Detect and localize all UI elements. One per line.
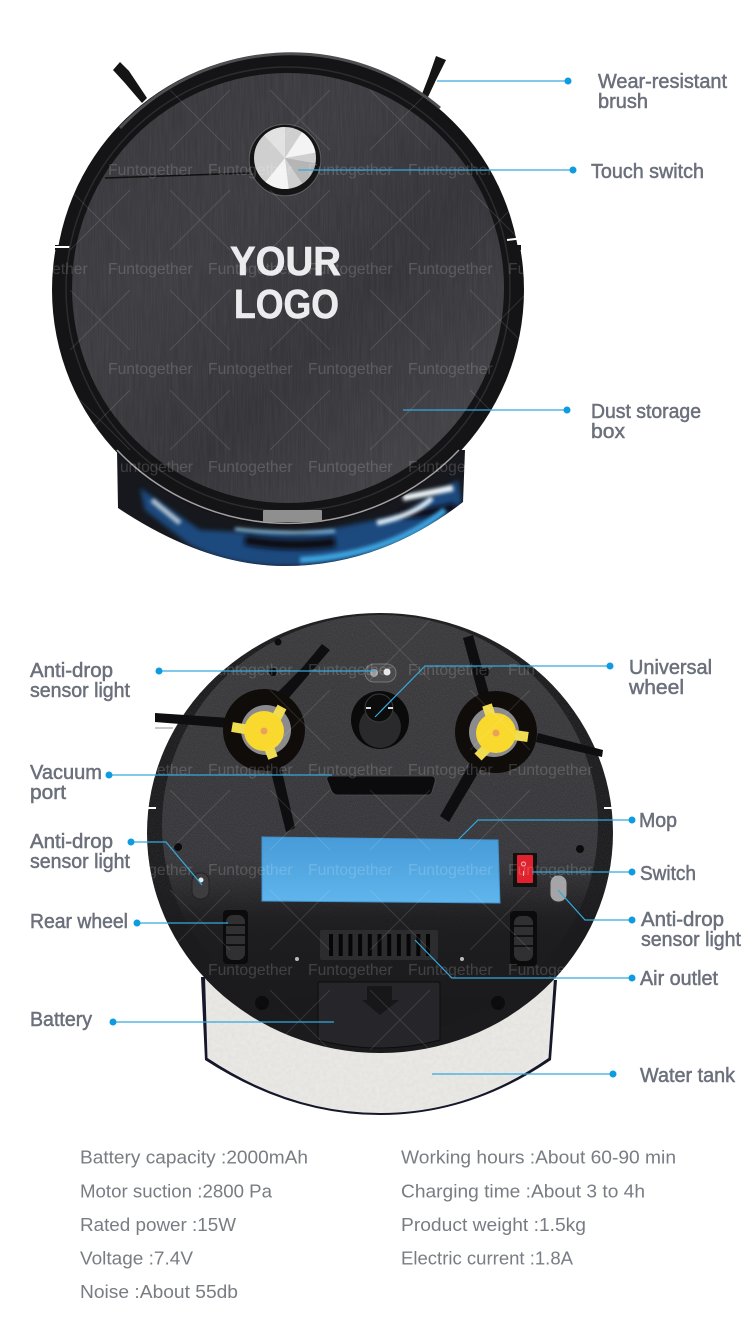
icon: left rear wheel <box>223 910 248 964</box>
watermark pattern, top robot: Funtogether <box>208 459 293 476</box>
callout: dust storage box: box <box>591 421 625 443</box>
callout: battery: Battery <box>30 1009 92 1031</box>
specifications: right column: Electric current :1.8A <box>401 1248 574 1268</box>
blue mop <box>262 837 500 903</box>
battery cover <box>318 982 440 1048</box>
watermark pattern, top robot: Fu <box>508 261 526 278</box>
screws <box>174 638 584 1010</box>
callout: rear wheel: Rear wheel <box>30 911 128 933</box>
watermark pattern, bottom robot: Funtogether <box>208 662 293 679</box>
callout: mop <box>452 810 677 846</box>
watermark pattern, bottom robot: Funtogether <box>108 862 193 879</box>
specifications: left column: Voltage :7.4V <box>80 1248 194 1268</box>
watermark pattern, top robot: Funtogether <box>308 361 393 378</box>
watermark pattern, bottom robot: Funtoge <box>508 962 566 979</box>
watermark pattern, bottom robot: Funtogether <box>308 962 393 979</box>
icon: side brushes, top view <box>113 56 446 103</box>
icon: power switch <box>513 853 537 887</box>
icon: right sensor light <box>550 875 567 902</box>
callout: dust storage box: Dust storage <box>591 401 701 423</box>
watermark pattern, bottom robot: Fun <box>508 662 535 679</box>
front bumper window <box>263 510 322 522</box>
callout: vacuum port: port <box>30 782 66 804</box>
top robot: top view <box>52 53 530 566</box>
brush highlight <box>155 727 173 729</box>
callout: air outlet <box>415 940 718 990</box>
logo <box>230 238 341 327</box>
specifications: left column: Noise :About 55db <box>80 1281 238 1302</box>
side brushes <box>155 635 603 832</box>
callout: touch switch <box>298 161 704 183</box>
watermark pattern, bottom robot: Funtogether <box>308 662 393 679</box>
callout: water tank <box>432 1065 736 1087</box>
watermark pattern, bottom robot <box>108 620 593 1050</box>
water tank, top view <box>117 450 465 566</box>
icon: left sensor light <box>192 873 209 899</box>
callout: water tank: Water tank <box>640 1065 736 1087</box>
callout: anti-drop sensor light, right: Anti-drop <box>641 909 724 931</box>
bottom robot: underside view <box>108 613 614 1116</box>
specifications: left column: Rated power :15W <box>80 1214 236 1235</box>
specifications: right column: Charging time :About 3 to 4h <box>401 1180 645 1202</box>
watermark pattern, top robot: Funtoge <box>408 459 466 476</box>
icon: left brush hub <box>223 689 305 771</box>
vacuum port <box>327 776 435 795</box>
watermark pattern, bottom robot: Funtogether <box>508 762 593 779</box>
watermark pattern, top robot: Funtogether <box>208 162 293 179</box>
callout: anti-drop sensor light, left: sensor light <box>30 851 130 873</box>
specifications: right column <box>401 1146 676 1268</box>
watermark pattern, bottom robot: Funtogether <box>508 862 593 879</box>
water tank mop pad <box>200 976 558 1116</box>
watermark pattern, top robot: Funtogether <box>308 261 393 278</box>
watermark pattern, top robot: Funtogether <box>208 361 293 378</box>
callout: wear-resistant brush: Wear-resistant <box>598 71 727 93</box>
air outlet <box>320 930 438 960</box>
callout: anti-drop sensor light, front: sensor light <box>30 680 130 702</box>
icon: universal wheel <box>351 691 409 749</box>
callout: anti-drop sensor light, left <box>30 831 202 885</box>
watermark pattern, top robot: Funtogether <box>308 459 393 476</box>
watermark pattern, top robot: Funtogether <box>408 162 493 179</box>
watermark pattern, bottom robot: Funtogether <box>408 762 493 779</box>
callout: rear wheel <box>30 911 228 933</box>
robot body outer ring <box>52 53 524 526</box>
callout: wear-resistant brush <box>437 71 727 113</box>
callout: dust storage box <box>403 401 701 443</box>
robot underside body <box>146 613 614 1053</box>
specifications: right column: Product weight :1.5kg <box>401 1214 586 1235</box>
callout: universal wheel <box>375 657 712 717</box>
callout: vacuum port: Vacuum <box>30 762 102 784</box>
watermark pattern, bottom robot: Funtogether <box>408 962 493 979</box>
specifications: left column: Battery capacity :2000mAh <box>80 1146 308 1168</box>
callout: anti-drop sensor light, front: Anti-drop <box>30 660 113 682</box>
logo: LOGO <box>234 281 339 327</box>
specifications: left column: Motor suction :2800 Pa <box>80 1180 273 1202</box>
logo: YOUR <box>230 238 341 284</box>
watermark pattern, bottom robot: Funtogether <box>208 862 293 879</box>
watermark pattern, top robot: Funtogether <box>408 361 493 378</box>
watermark pattern, bottom robot: Funtogether <box>408 662 493 679</box>
callout: battery <box>30 1009 334 1031</box>
callout: vacuum port <box>30 762 332 804</box>
icon: right brush hub <box>455 691 537 773</box>
callout: switch <box>532 863 696 885</box>
callout: switch: Switch <box>640 863 696 885</box>
watermark pattern, bottom robot: Funtogether <box>308 762 393 779</box>
watermark pattern, top robot: Funtogether <box>108 261 193 278</box>
top cover disk <box>72 73 505 503</box>
air outlet side screws <box>295 957 464 961</box>
specifications: right column: Working hours :About 60-90 min <box>401 1146 676 1168</box>
watermark pattern, top robot: Funtogether <box>308 162 393 179</box>
watermark pattern, bottom robot: Funtogether <box>408 862 493 879</box>
icon: sensor light, front <box>365 664 396 682</box>
watermark pattern, bottom robot: Funtogether <box>208 762 293 779</box>
specifications: left column <box>80 1146 308 1302</box>
icon: right rear wheel <box>510 911 537 966</box>
callout: anti-drop sensor light, left: Anti-drop <box>30 831 113 853</box>
watermark pattern, top robot: Funtogether <box>408 261 493 278</box>
icon: touch switch button <box>248 123 322 197</box>
watermark pattern, top robot: untogether <box>120 459 193 476</box>
callout: air outlet: Air outlet <box>640 968 718 990</box>
callout: anti-drop sensor light, right: sensor light <box>641 929 741 951</box>
watermark pattern, top robot: ether <box>52 261 88 278</box>
watermark pattern, top robot: Funtogether <box>108 361 193 378</box>
callout: touch switch: Touch switch <box>591 161 704 183</box>
watermark pattern, top robot: Funtogether <box>108 162 193 179</box>
watermark pattern, top robot: Funtogether <box>208 261 293 278</box>
callout: anti-drop sensor light, right <box>558 890 741 951</box>
watermark pattern, bottom robot: Funtogether <box>208 962 293 979</box>
watermark pattern, top robot <box>52 90 530 476</box>
callout: universal wheel: wheel <box>628 677 684 699</box>
callout: wear-resistant brush: brush <box>598 91 648 113</box>
callout: mop: Mop <box>639 810 677 832</box>
callout: anti-drop sensor light, front <box>30 660 375 702</box>
callout: universal wheel: Universal <box>629 657 712 679</box>
watermark pattern, bottom robot: Funtogether <box>108 762 193 779</box>
watermark pattern, bottom robot: Funtogether <box>308 862 393 879</box>
